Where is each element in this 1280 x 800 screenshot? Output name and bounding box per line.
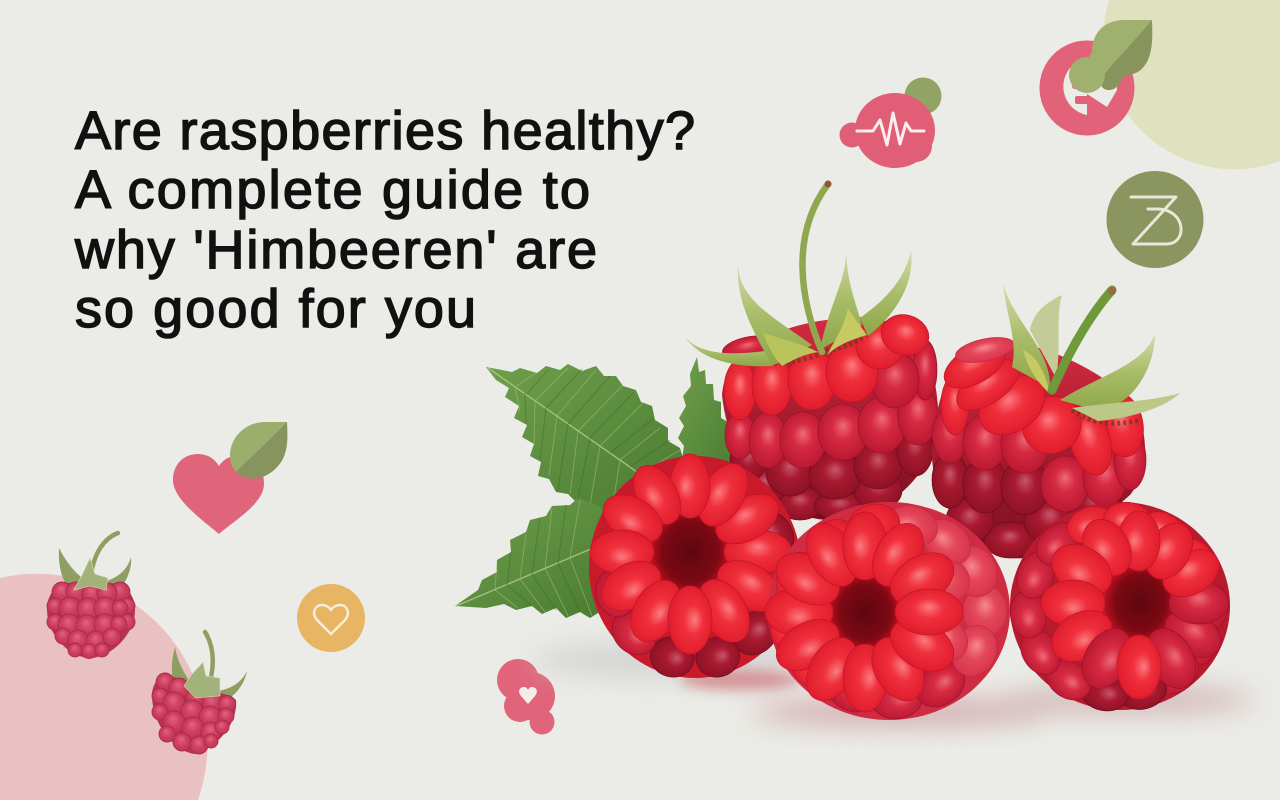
icon: pink blob heart [497, 659, 555, 734]
icon: yellow heart badge [297, 584, 365, 652]
inner lobes [765, 512, 976, 712]
raspberry leaves [455, 357, 742, 618]
illustrated raspberry: left [47, 533, 135, 658]
illustrated raspberry: lower [152, 632, 247, 754]
title: A complete guide to [75, 160, 590, 220]
raspberry: ring left [589, 454, 804, 682]
outer lobes [1008, 500, 1228, 715]
inner lobes [1041, 511, 1229, 699]
icon: pink ring with leaf [1040, 20, 1152, 136]
drupelets [932, 332, 1148, 558]
leaf: lower [455, 498, 615, 618]
outer lobes [766, 500, 1007, 721]
raspberry: upper right with sepals [932, 283, 1180, 558]
raspberry: upper left with sepals [684, 180, 938, 520]
leaf: large [486, 364, 684, 515]
raspberry: ring right [1008, 500, 1230, 715]
calyx, sepals and stem [1003, 283, 1180, 423]
berry shadows [530, 642, 1255, 724]
title [74, 101, 695, 339]
title: why 'Himbeeren' are [74, 220, 597, 280]
outer lobes [590, 505, 804, 682]
title: so good for you [75, 279, 476, 339]
icon: heart with leaf [173, 422, 287, 534]
decorative green circle [1103, 0, 1280, 169]
icon: heart rate badge [840, 78, 942, 168]
raspberry: ring centre [765, 500, 1010, 721]
title: Are raspberries healthy? [75, 101, 695, 161]
leaf: back [678, 357, 742, 470]
calyx, sepals and stem [684, 180, 912, 366]
inner lobes [590, 454, 792, 654]
decorative pink circle [0, 574, 208, 800]
icon: green z badge [1106, 171, 1204, 268]
drupelets [720, 309, 938, 520]
